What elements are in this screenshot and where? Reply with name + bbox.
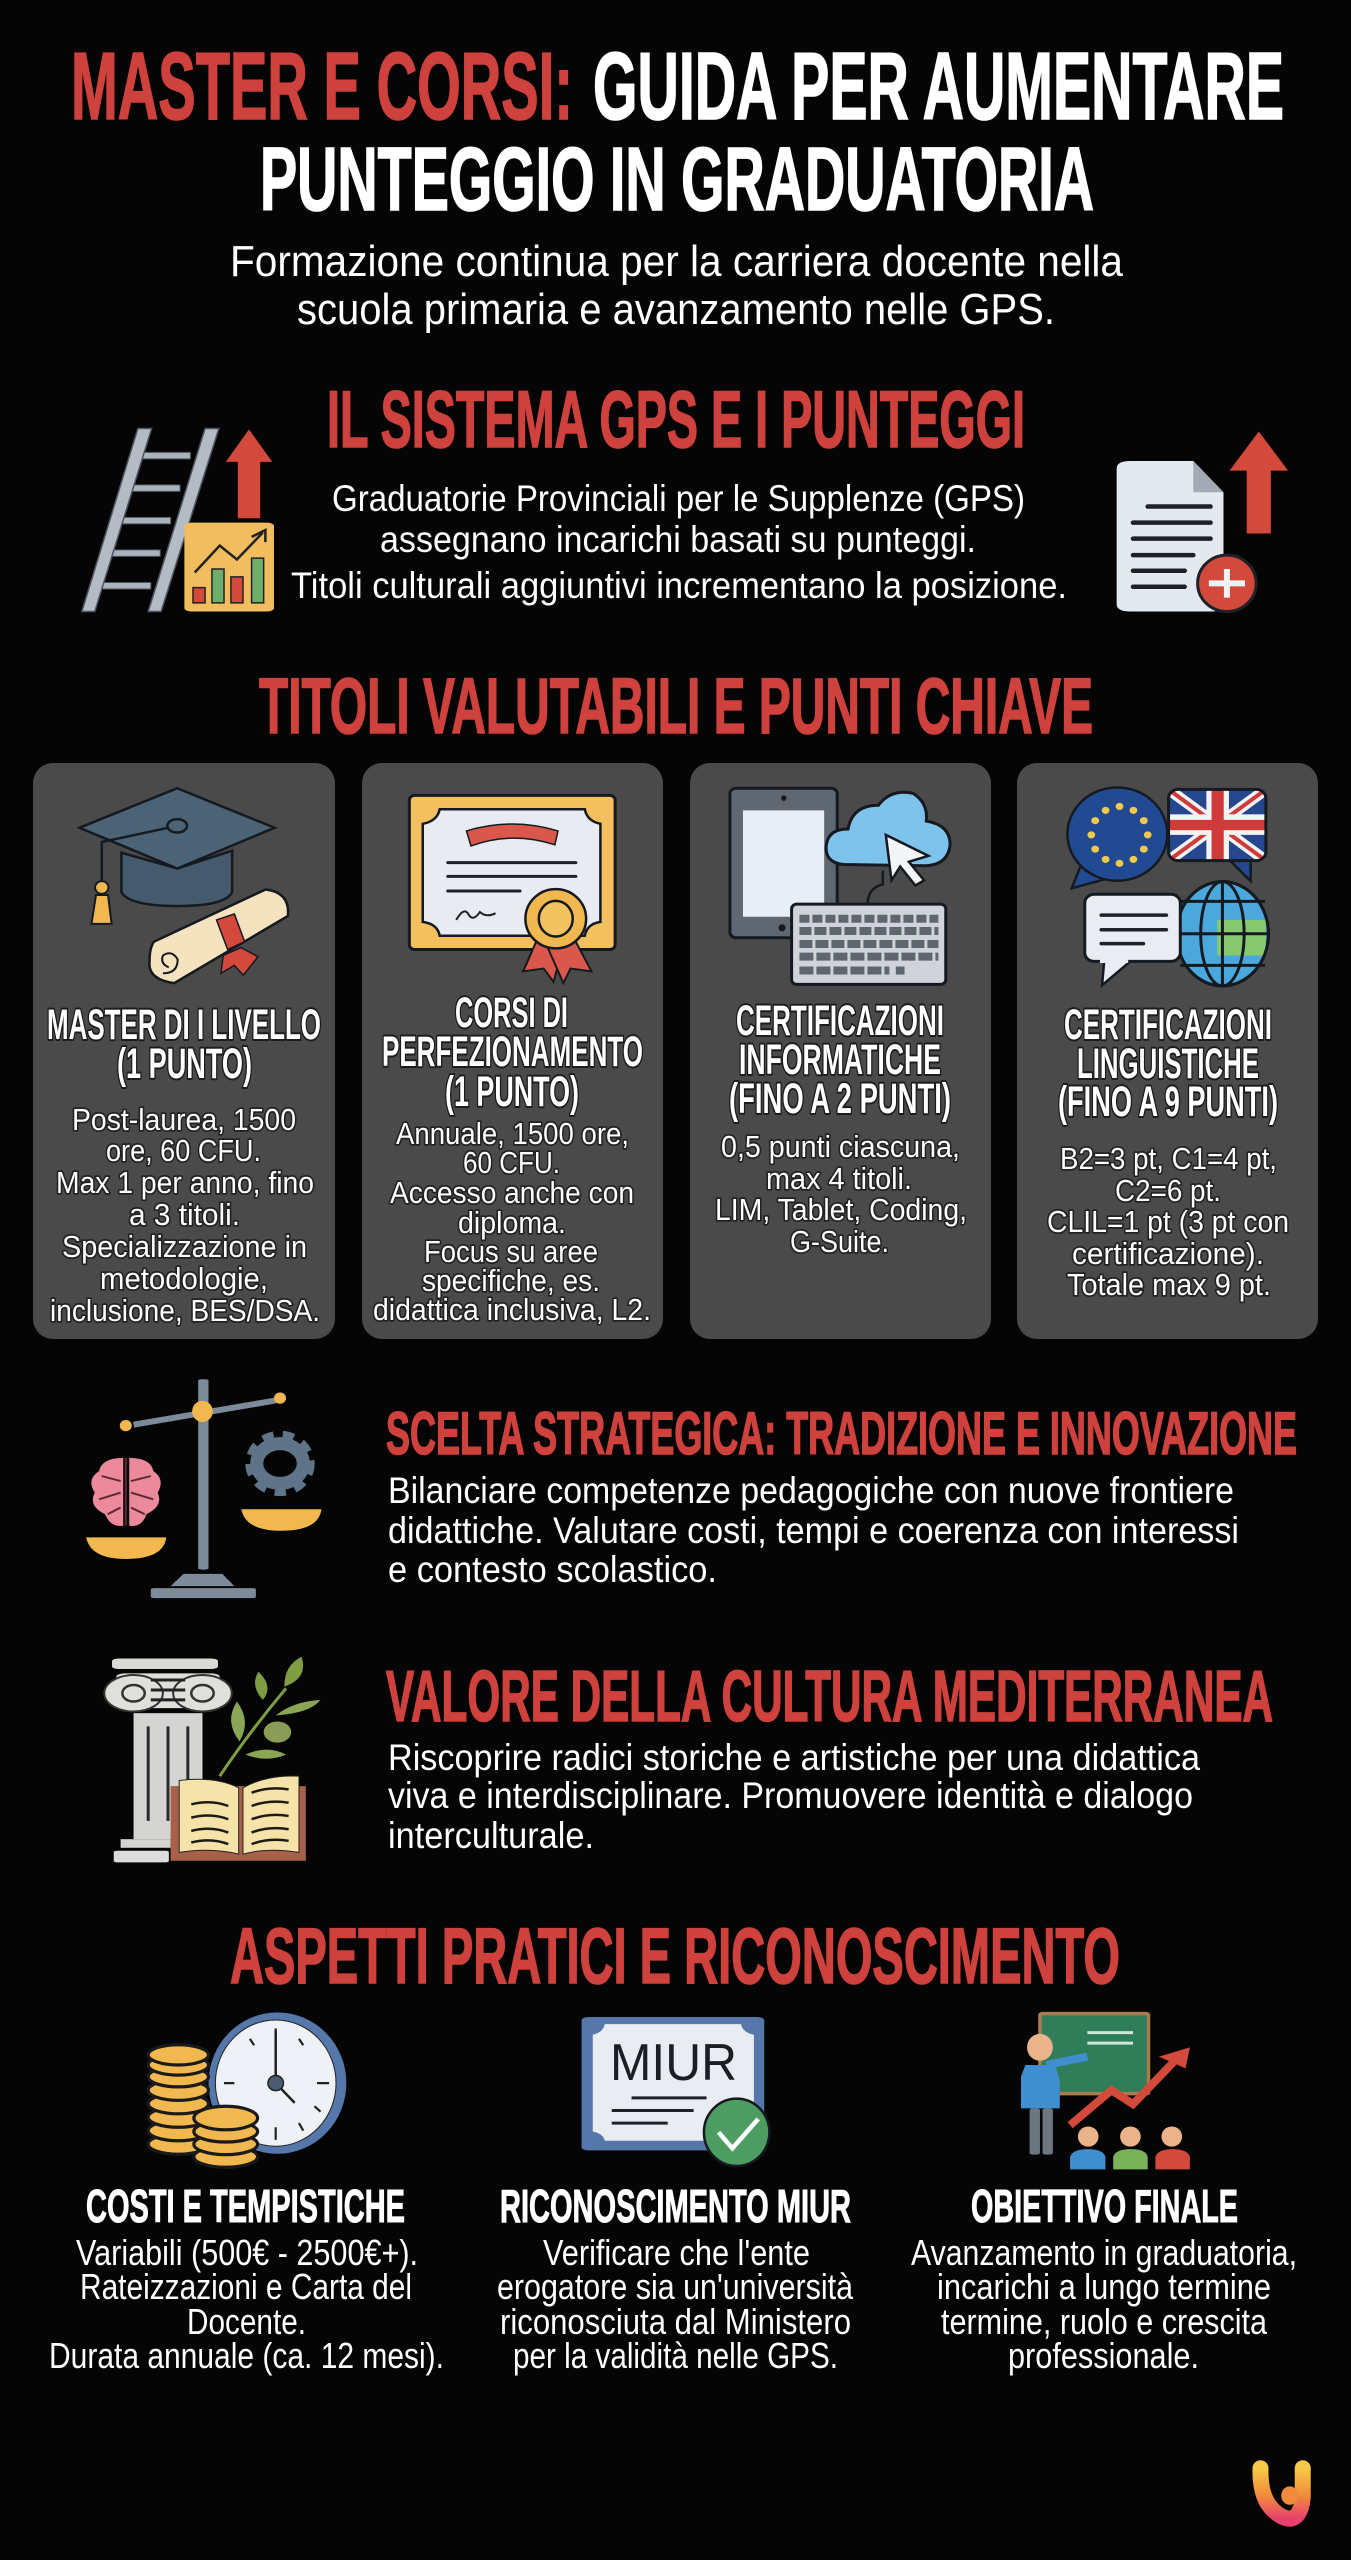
column: obiettivo finale: professionale.	[1008, 2335, 1199, 2376]
card text: G-Suite.	[790, 1224, 889, 1259]
card title: CERTIFICAZIONI	[736, 997, 944, 1045]
card text: 0,5 punti ciascuna,	[721, 1129, 960, 1164]
card text: Post-laurea, 1500	[72, 1102, 296, 1137]
column: obiettivo finale: incarichi a lungo termine	[937, 2266, 1271, 2307]
card text: Specializzazione in	[62, 1229, 307, 1264]
subtitle	[230, 237, 1123, 334]
card title: (FINO A 2 PUNTI)	[729, 1075, 951, 1123]
card title	[382, 989, 643, 1116]
column: riconoscimento MIUR: riconosciuta dal Ministero	[500, 2301, 851, 2342]
block: scelta strategica: didattiche. Valutare costi, tempi e coerenza con interessi	[388, 1510, 1239, 1551]
card text: specifiche, es.	[422, 1263, 600, 1298]
card title	[1058, 1001, 1278, 1126]
icon: MIUR certificate with check	[582, 2017, 769, 2166]
column: riconoscimento MIUR: per la validità nelle GPS.	[513, 2335, 838, 2376]
card title	[47, 1001, 321, 1088]
card text: Focus su aree	[424, 1234, 598, 1269]
icon: ladder, arrow and chart	[82, 428, 274, 612]
title	[71, 33, 1284, 230]
card title	[729, 997, 951, 1123]
block: cultura mediterranea	[386, 1657, 1273, 1856]
subtitle: scuola primaria e avanzamento nelle GPS.	[297, 285, 1055, 334]
block: cultura mediterranea: viva e interdisciplinare. Promuovere identità e dialogo	[388, 1775, 1193, 1816]
column: costi e tempistiche: COSTI E TEMPISTICHE	[86, 2180, 405, 2232]
card text: B2=3 pt, C1=4 pt,	[1060, 1141, 1277, 1176]
card text: C2=6 pt.	[1115, 1173, 1221, 1208]
card text: Annuale, 1500 ore,	[396, 1116, 629, 1151]
column: obiettivo finale: termine, ruolo e crescita	[941, 2301, 1268, 2342]
panel: certificazioni informatiche	[690, 763, 991, 1339]
column: costi e tempistiche: Durata annuale (ca. 12 mesi).	[49, 2335, 444, 2376]
block: scelta strategica: e contesto scolastico.	[388, 1549, 717, 1590]
text: GPS description: assegnano incarichi basati su punteggi.	[380, 519, 976, 560]
icon: certificate with medal	[409, 795, 615, 983]
card text: Totale max 9 pt.	[1067, 1267, 1271, 1302]
panel: corsi di perfezionamento	[362, 763, 663, 1339]
card title: (1 PUNTO)	[445, 1068, 579, 1116]
card text: diploma.	[458, 1205, 566, 1240]
card text: ore, 60 CFU.	[106, 1133, 261, 1168]
card text	[1047, 1141, 1289, 1302]
card text: certificazione).	[1072, 1236, 1264, 1271]
card text: didattica inclusiva, L2.	[373, 1292, 651, 1327]
text: GPS description	[291, 478, 1067, 606]
icon: teacher, blackboard, rising arrow and students	[1021, 2014, 1190, 2169]
card text: metodologie,	[100, 1261, 268, 1296]
card text: Accesso anche con	[390, 1175, 634, 1210]
icon: balance with brain and gear	[86, 1379, 321, 1598]
column: riconoscimento MIUR	[497, 2180, 854, 2376]
title: MASTER E CORSI:	[71, 33, 573, 140]
block: scelta strategica	[386, 1400, 1297, 1590]
icon: MIUR certificate with check: MIUR	[610, 2034, 737, 2092]
card text	[50, 1102, 320, 1328]
card title: PERFEZIONAMENTO	[382, 1028, 643, 1076]
column: riconoscimento MIUR: RICONOSCIMENTO MIUR	[500, 2180, 851, 2232]
block: cultura mediterranea: interculturale.	[388, 1815, 594, 1856]
block: cultura mediterranea: Riscoprire radici storiche e artistiche per una didattica	[388, 1737, 1200, 1778]
text: GPS description: Graduatorie Provinciali per le Supplenze (GPS)	[332, 478, 1025, 519]
icon: graduation cap and diploma	[79, 788, 288, 983]
card text: 60 CFU.	[463, 1145, 560, 1180]
column: costi e tempistiche: Rateizzazioni e Carta del	[80, 2266, 412, 2307]
subtitle: Formazione continua per la carriera docente nella	[230, 237, 1123, 286]
icon: logo	[1260, 2468, 1303, 2519]
panel: certificazioni linguistiche	[1017, 763, 1318, 1339]
card text: Max 1 per anno, fino	[56, 1165, 314, 1200]
icon: language speech bubbles and globe	[1067, 787, 1268, 986]
card title: (1 PUNTO)	[117, 1040, 252, 1088]
column: riconoscimento MIUR: Verificare che l'ente	[543, 2232, 810, 2273]
text: GPS description: Titoli culturali aggiuntivi incrementano la posizione.	[291, 565, 1067, 606]
panel: master di I livello	[33, 763, 335, 1339]
card text: LIM, Tablet, Coding,	[715, 1192, 967, 1227]
column: obiettivo finale	[911, 2180, 1297, 2376]
card text: CLIL=1 pt (3 pt con	[1047, 1204, 1289, 1239]
block: scelta strategica: Bilanciare competenze pedagogiche con nuove frontiere	[388, 1470, 1234, 1511]
card text: inclusione, BES/DSA.	[50, 1293, 320, 1328]
card text: a 3 titoli.	[129, 1197, 240, 1232]
column: costi e tempistiche: Docente.	[187, 2301, 306, 2342]
column: costi e tempistiche	[49, 2180, 444, 2376]
column: riconoscimento MIUR: erogatore sia un'università	[497, 2266, 854, 2307]
icon: document with plus and arrow	[1117, 432, 1288, 612]
card title: INFORMATICHE	[739, 1036, 941, 1084]
card text: max 4 titoli.	[766, 1161, 912, 1196]
card text	[373, 1116, 651, 1327]
icon: tablet, cloud and keyboard	[730, 788, 950, 984]
card title: MASTER DI I LIVELLO	[47, 1001, 321, 1049]
icon: coins and clock	[148, 2012, 346, 2167]
card text	[715, 1129, 967, 1259]
card title: CORSI DI	[455, 989, 568, 1037]
icon: column, olive branch and book	[104, 1657, 321, 1862]
column: costi e tempistiche: Variabili (500€ - 2500€+).	[76, 2232, 418, 2273]
